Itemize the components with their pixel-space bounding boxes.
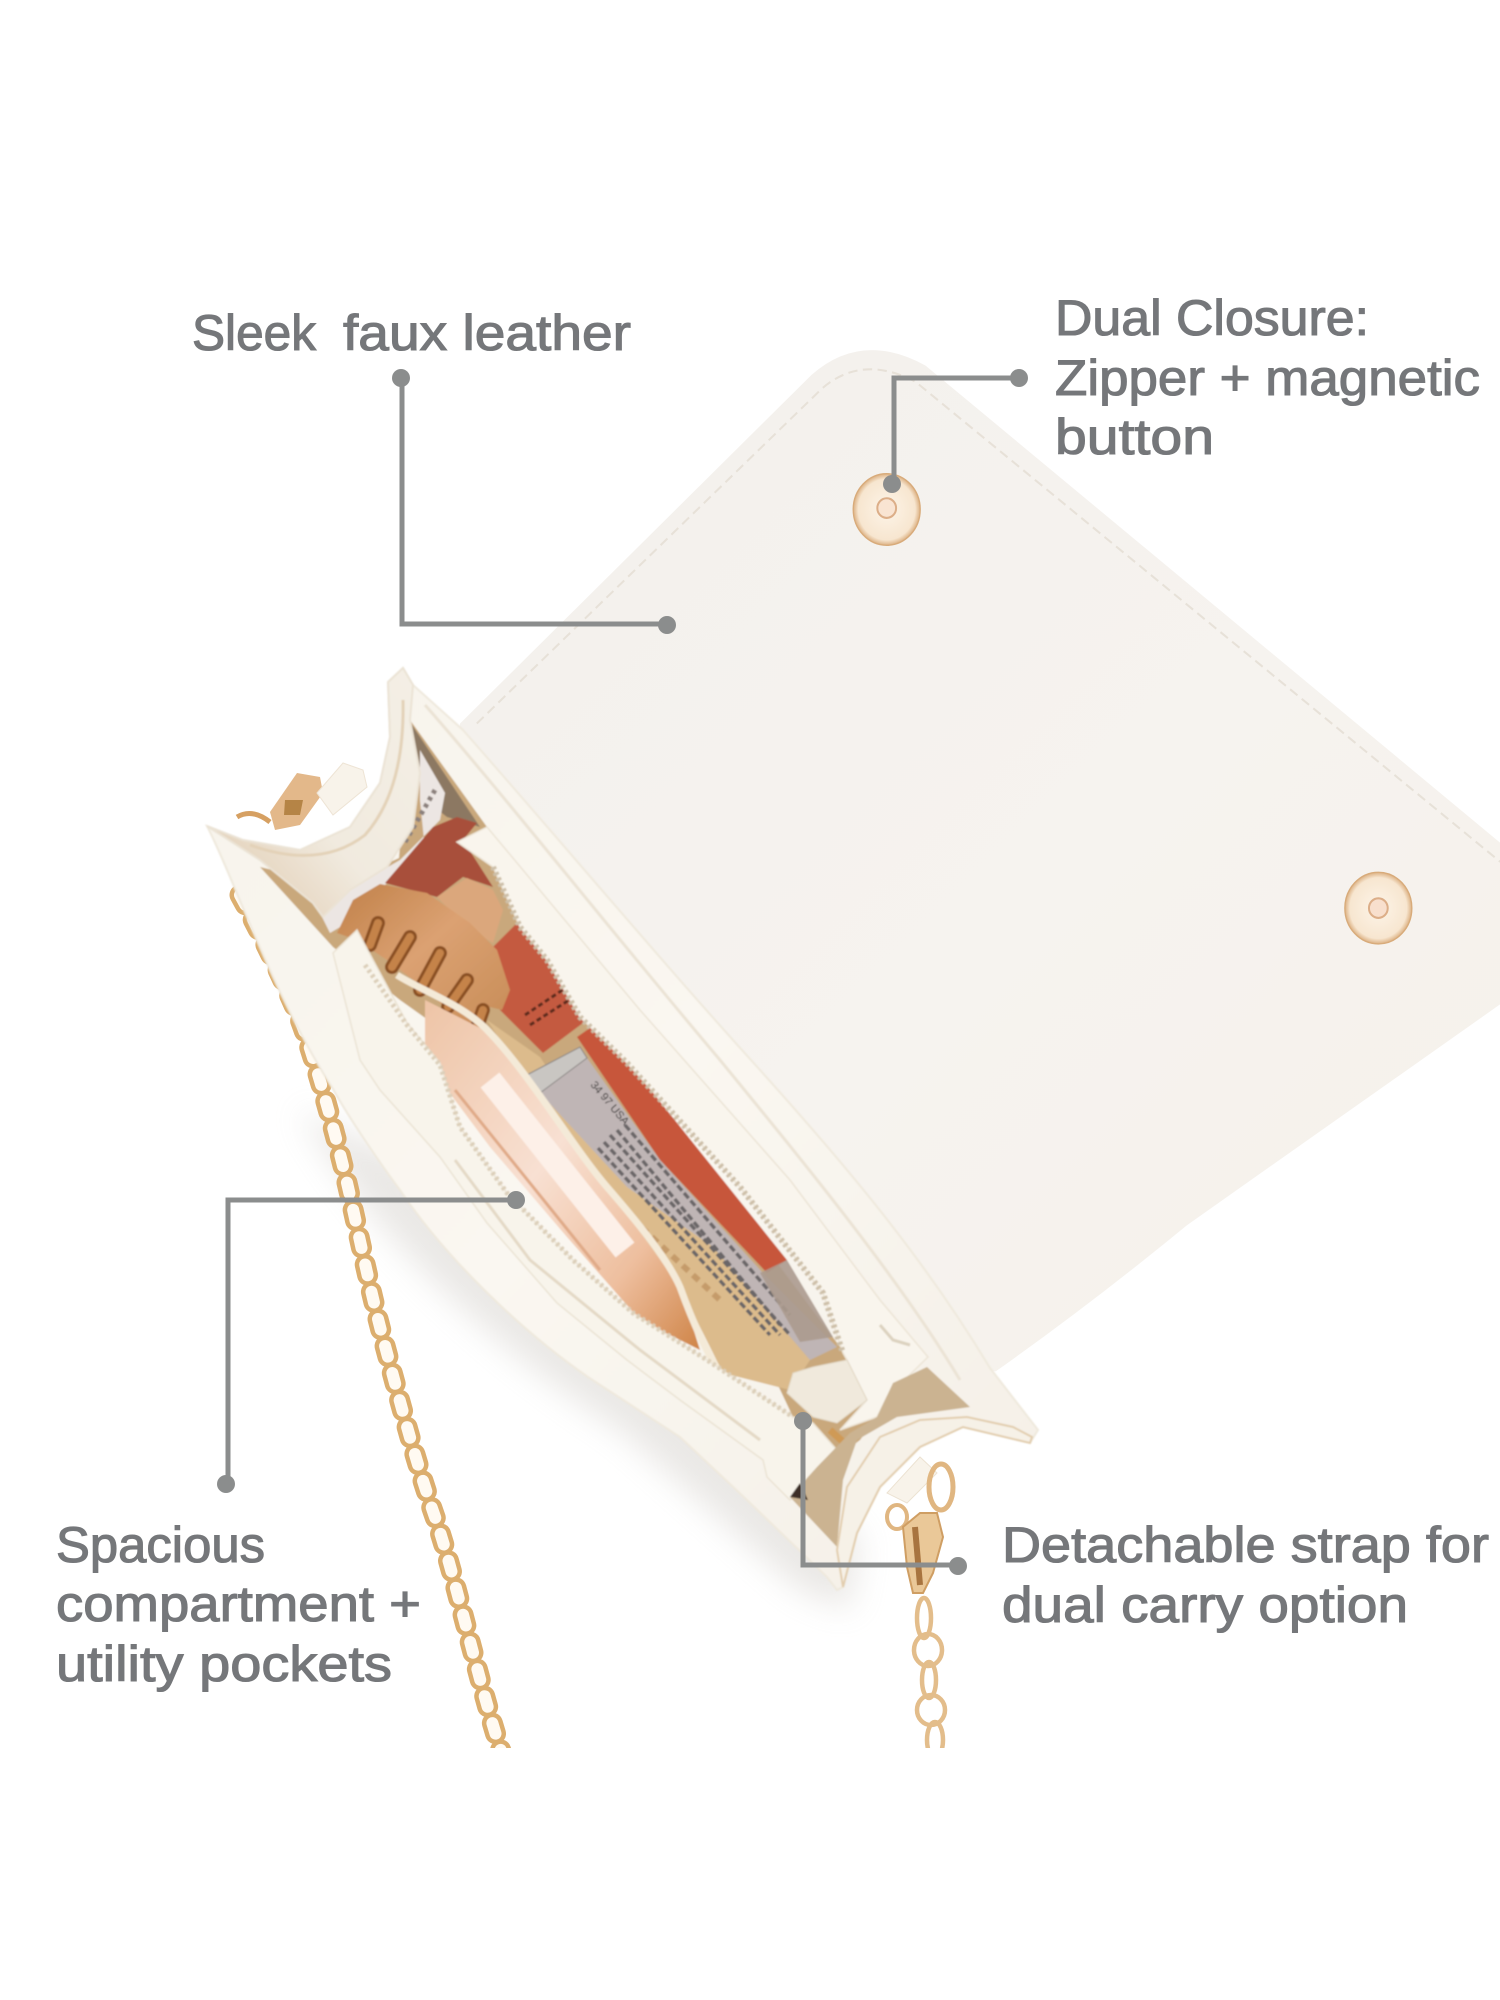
label text: Sleek: [192, 305, 317, 361]
label text: [192, 305, 631, 361]
lipstick cap: [385, 817, 493, 897]
leader line: [883, 369, 1028, 493]
body shell: [207, 668, 1038, 1590]
label text: Detachable strap for: [1002, 1517, 1489, 1573]
callout: sleek faux leather: [192, 305, 676, 634]
left zip pocket flap: [333, 930, 837, 1500]
callout: detachable strap: [794, 1412, 1489, 1633]
hair claw clip: [337, 884, 510, 1043]
bag shadow: [300, 1110, 860, 1610]
far end gusset lining: [790, 1367, 970, 1547]
stitching: [477, 369, 1500, 862]
leader line: [794, 1412, 967, 1575]
label text: Spacious: [56, 1517, 265, 1573]
callout: dual closure: [883, 290, 1480, 493]
red pen: [577, 1023, 787, 1273]
upper shadow gap: [410, 722, 480, 827]
near clasp hardware: [237, 763, 367, 830]
tan satin lining: [487, 1020, 810, 1390]
flap: [457, 350, 1500, 1373]
zipper pull: [828, 1428, 844, 1444]
callout: spacious compartment: [56, 1191, 525, 1692]
strap: left chain: [240, 895, 504, 1760]
label text: utility pockets: [56, 1636, 392, 1692]
label text: Dual Closure:: [1055, 290, 1369, 346]
bag body: [207, 668, 1038, 1590]
interior lining: [260, 720, 877, 1463]
printed tube: [523, 1047, 837, 1360]
label text: [56, 1517, 421, 1692]
pocket piping: [397, 975, 720, 1373]
label text: compartment +: [56, 1576, 421, 1632]
leader line: [392, 369, 676, 634]
red gloss body: [493, 924, 584, 1054]
right zipper pocket: [457, 827, 928, 1430]
far end gusset: [837, 1417, 1032, 1587]
label text: Zipper + magnetic: [1055, 350, 1480, 406]
lipstick gold tube: [437, 878, 503, 943]
label text: dual carry option: [1002, 1577, 1408, 1633]
rose gold compact: [425, 1000, 700, 1350]
label text: button: [1055, 409, 1214, 465]
strap: right chain and clasp: [887, 1457, 953, 1758]
wall ridges: [425, 705, 960, 1380]
paper insert: [320, 750, 445, 933]
magnetic button 2: [1345, 872, 1412, 944]
printed tube: 34 97 USA: [588, 1079, 632, 1128]
label text: [1002, 1517, 1489, 1633]
lining stain: [646, 1228, 722, 1302]
label text: [1055, 290, 1480, 465]
magnetic button 1: [853, 474, 920, 545]
clear applicator: [760, 1260, 833, 1342]
gusset inner rim: [250, 700, 403, 855]
label text: faux leather: [343, 305, 631, 361]
near end gusset: [207, 668, 420, 917]
leader line: [217, 1191, 525, 1493]
zipper end tab: [787, 1360, 867, 1423]
product photo: open handbag: [207, 350, 1500, 1760]
